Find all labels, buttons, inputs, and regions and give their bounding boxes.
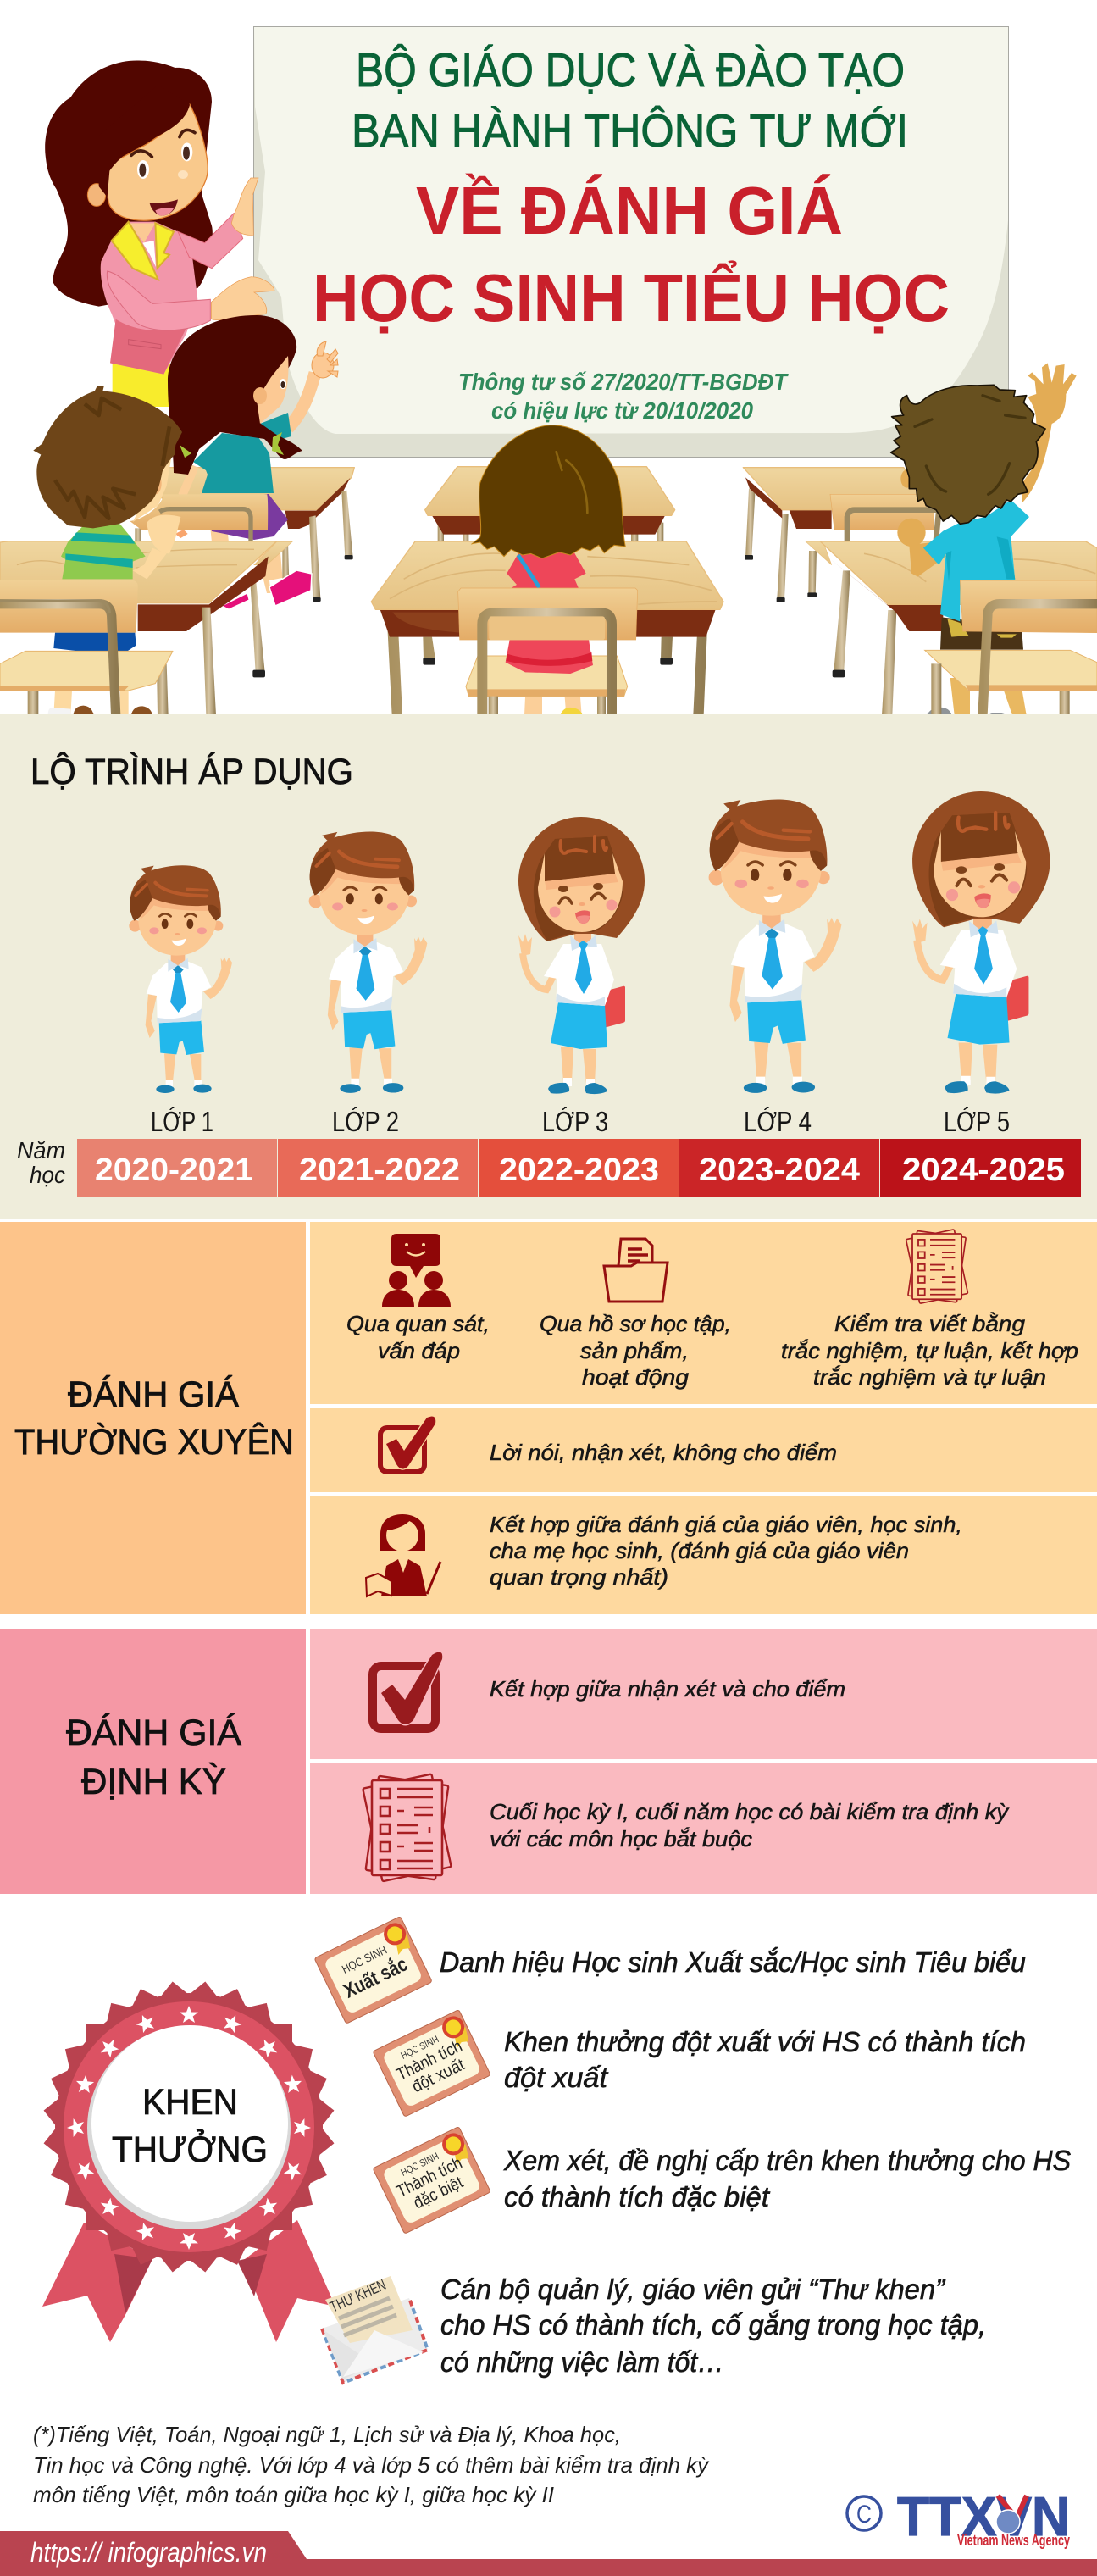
panel: periodic assessment xyxy=(0,1629,1097,1894)
icon: certificate xyxy=(314,1916,432,2024)
reward item 4 xyxy=(322,2273,986,2383)
reward text: có thành tích đặc biệt xyxy=(504,2181,771,2212)
shirt xyxy=(193,433,274,493)
footnote xyxy=(33,2422,710,2507)
reward text: có những việc làm tốt… xyxy=(440,2346,724,2378)
chair seat xyxy=(466,656,628,697)
row 1 labels xyxy=(346,1311,1078,1390)
row 1 labels: trắc nghiệm và tự luận xyxy=(813,1364,1046,1390)
icon: letter: THƯ KHEN xyxy=(327,2276,389,2316)
student girl: teal shirt xyxy=(168,315,338,609)
reward text: Danh hiệu Học sinh Xuất sắc/Học sinh Tiêu biểu xyxy=(440,1946,1026,1978)
legs xyxy=(524,697,582,715)
row 1 labels: sản phẩm, xyxy=(580,1338,689,1363)
row 3 text: cha mẹ học sinh, (đánh giá của giáo viên xyxy=(490,1538,909,1563)
ring xyxy=(64,2001,314,2252)
school year timeline: 2020-2021 xyxy=(95,1152,253,1188)
chair seat xyxy=(925,650,1097,691)
footer url: https:// infographics.vn xyxy=(30,2537,267,2568)
reward text: đột xuất xyxy=(504,2062,609,2093)
badge label: THƯỞNG xyxy=(112,2129,268,2170)
pants xyxy=(940,617,1023,650)
reward item 3 xyxy=(373,2126,1071,2234)
ring stars xyxy=(67,2006,311,2250)
row 2 text: Cuối học kỳ I, cuối năm học có bài kiểm tra định kỳ xyxy=(490,1799,1010,1824)
row 2 text xyxy=(490,1799,1010,1852)
school year label xyxy=(17,1137,65,1188)
icon: teacher with book xyxy=(366,1514,440,1596)
icon: check small xyxy=(380,1417,435,1472)
icon: certificate: đặc biệt xyxy=(411,2173,467,2212)
chair back xyxy=(960,580,1097,633)
legs xyxy=(53,691,129,715)
sleeve xyxy=(260,413,291,441)
desk top xyxy=(371,541,723,609)
student grade 4 xyxy=(709,800,841,1093)
title line 4: HỌC SINH TIỂU HỌC xyxy=(313,260,950,336)
school year timeline: 2023-2024 xyxy=(699,1152,860,1188)
other arm xyxy=(909,542,946,577)
icon: certificate: HỌC SINH xyxy=(399,2150,440,2179)
row 2 text: Lời nói, nhận xét, không cho điểm xyxy=(490,1440,837,1465)
teacher skirt top xyxy=(113,364,172,407)
school year label: học xyxy=(30,1162,65,1188)
raised hand xyxy=(1028,363,1077,424)
reward text: Khen thưởng đột xuất với HS có thành tích xyxy=(504,2026,1026,2057)
row 3 text: quan trọng nhất) xyxy=(490,1564,668,1590)
dress xyxy=(507,551,586,589)
chair back xyxy=(458,588,638,640)
back desk middle xyxy=(425,467,675,542)
teacher jacket xyxy=(101,214,243,375)
teacher hair back xyxy=(45,61,213,307)
row 1 labels: hoạt động xyxy=(582,1364,690,1390)
board xyxy=(254,27,1008,458)
row 1 labels: vấn đáp xyxy=(378,1338,460,1363)
banner illustration: classroom xyxy=(0,27,1097,716)
panel: continuous assessment xyxy=(0,1222,1097,1614)
reward text xyxy=(503,2145,1071,2212)
icon: certificate: Xuất sắc xyxy=(340,1952,411,2003)
legs and shoes xyxy=(254,542,284,593)
face sliver xyxy=(133,452,172,522)
grade labels: LỚP 3 xyxy=(542,1106,608,1137)
panel heading: THƯỜNG XUYÊN xyxy=(14,1422,294,1463)
school year timeline: 2022-2023 xyxy=(499,1152,659,1188)
student grade 3 xyxy=(518,817,645,1094)
icon: certificate: HỌC SINH xyxy=(340,1943,389,1976)
teacher hands xyxy=(211,178,274,320)
grade labels: LỚP 2 xyxy=(332,1106,399,1137)
footnote: môn tiếng Việt, môn toán giữa học kỳ I, giữa học kỳ II xyxy=(33,2482,554,2507)
right front desk xyxy=(806,541,1097,715)
row 3 text xyxy=(490,1512,962,1590)
reward text xyxy=(440,2273,986,2378)
section: roadmap background xyxy=(0,714,1097,1219)
hair xyxy=(891,385,1045,524)
rosette xyxy=(44,1982,334,2272)
student grade 5 xyxy=(912,791,1050,1094)
center disc xyxy=(87,2025,291,2229)
shirt xyxy=(923,500,1029,621)
hair xyxy=(472,425,625,558)
icon: certificate: HỌC SINH xyxy=(399,2033,440,2062)
shirt xyxy=(61,524,146,579)
row 1 text: Kết hợp giữa nhận xét và cho điểm xyxy=(490,1676,845,1702)
shoes xyxy=(74,706,152,715)
right back chair xyxy=(807,494,939,597)
face xyxy=(257,356,289,424)
front desk legs xyxy=(423,637,673,659)
icon: letter xyxy=(322,2276,428,2383)
ear xyxy=(900,469,913,488)
reward text: Cán bộ quản lý, giáo viên gửi “Thư khen” xyxy=(440,2273,946,2305)
title line 2: BAN HÀNH THÔNG TƯ MỚI xyxy=(352,104,908,157)
footer band xyxy=(0,2531,1097,2576)
skirt xyxy=(203,494,288,540)
school year timeline: 2024-2025 xyxy=(902,1152,1065,1188)
front-left chair xyxy=(0,580,173,716)
skirt xyxy=(506,640,593,674)
subtitle: có hiệu lực từ 20/10/2020 xyxy=(491,397,753,424)
panel heading: ĐÁNH GIÁ xyxy=(68,1374,239,1415)
row 1 labels: Kiểm tra viết bằng xyxy=(834,1311,1026,1336)
hand xyxy=(312,341,338,378)
grade labels: LỚP 4 xyxy=(744,1106,812,1137)
reward item 2 xyxy=(373,2009,1026,2117)
school year timeline: 2021-2022 xyxy=(299,1152,460,1188)
reward text: Xem xét, đề nghị cấp trên khen thưởng cho HS xyxy=(503,2145,1071,2176)
roadmap heading: LỘ TRÌNH ÁP DỤNG xyxy=(30,752,353,792)
grade labels: LỚP 5 xyxy=(944,1106,1010,1137)
student boy: striped shirt xyxy=(33,386,182,715)
student boy: blue shirt xyxy=(891,363,1097,715)
raised arm xyxy=(1022,424,1052,502)
footnote: Tin học và Công nghệ. Với lớp 4 và lớp 5 có thêm bài kiểm tra định kỳ xyxy=(33,2452,710,2478)
row 2 text: với các môn học bắt buộc xyxy=(490,1826,752,1852)
student grade 2 xyxy=(309,831,427,1093)
back desk right xyxy=(743,468,932,602)
hair bows xyxy=(272,432,284,455)
row 1 labels: Qua quan sát, xyxy=(346,1311,490,1336)
grade labels: LỚP 1 xyxy=(151,1106,213,1137)
icon: test sheets large xyxy=(363,1774,452,1881)
desk drawer xyxy=(380,608,716,637)
reward text: cho HS có thành tích, cố gắng trong học tập, xyxy=(440,2309,986,2340)
school year label: Năm xyxy=(17,1137,65,1163)
student girl: brown hair with desk and chair xyxy=(371,425,723,715)
raised arm xyxy=(288,373,315,428)
ribbon tails xyxy=(42,2220,335,2342)
grade labels xyxy=(151,1106,1010,1137)
footnote: (*)Tiếng Việt, Toán, Ngoại ngữ 1, Lịch sử và Địa lý, Khoa học, xyxy=(33,2422,621,2447)
back-left chair xyxy=(130,494,268,542)
hair xyxy=(33,386,182,528)
reward item 1 xyxy=(314,1916,1026,2024)
icon: check large xyxy=(373,1652,442,1729)
icon: certificate: Thành tích xyxy=(394,2037,465,2085)
board title xyxy=(313,43,950,424)
subtitle xyxy=(458,369,790,424)
badge label: KHEN xyxy=(142,2082,238,2123)
row 1 labels: Qua hồ sơ học tập, xyxy=(540,1311,731,1336)
icon: test sheets small xyxy=(906,1230,968,1303)
panel heading: ĐỊNH KỲ xyxy=(81,1762,226,1802)
subtitle: Thông tư số 27/2020/TT-BGDĐT xyxy=(458,369,790,395)
badge: rewards xyxy=(42,1982,335,2342)
logo: TTXVN: C xyxy=(856,2501,872,2529)
row 1 labels: trắc nghiệm, tự luận, kết hợp xyxy=(781,1338,1078,1363)
arm xyxy=(133,548,167,579)
badge label xyxy=(112,2082,268,2170)
hair xyxy=(168,315,302,475)
icon: certificate xyxy=(373,2009,490,2117)
title line 3: VỀ ĐÁNH GIÁ xyxy=(416,173,843,248)
student grade 1 xyxy=(129,865,232,1093)
icon: certificate: Thành tích xyxy=(394,2154,465,2201)
teacher face xyxy=(87,85,208,220)
left arm xyxy=(182,466,195,496)
icon: certificate xyxy=(373,2126,490,2234)
legs xyxy=(950,678,1027,715)
panel heading xyxy=(14,1374,294,1463)
reward text xyxy=(504,2026,1026,2093)
shorts xyxy=(53,633,136,659)
panel heading xyxy=(66,1713,241,1802)
title line 1: BỘ GIÁO DỤC VÀ ĐÀO TẠO xyxy=(356,43,905,97)
panel heading: ĐÁNH GIÁ xyxy=(66,1713,241,1753)
row 3 text: Kết hợp giữa đánh giá của giáo viên, học sinh, xyxy=(490,1512,962,1537)
icon: certificate: đột xuất xyxy=(409,2055,468,2096)
logo: TTXVN: TTXVN xyxy=(897,2485,1070,2547)
front-left desk xyxy=(0,541,292,715)
school year timeline xyxy=(77,1139,1081,1197)
back desk left xyxy=(113,468,354,602)
teacher xyxy=(45,61,274,407)
icon: folder xyxy=(604,1239,668,1302)
icon: people talking xyxy=(382,1234,451,1307)
